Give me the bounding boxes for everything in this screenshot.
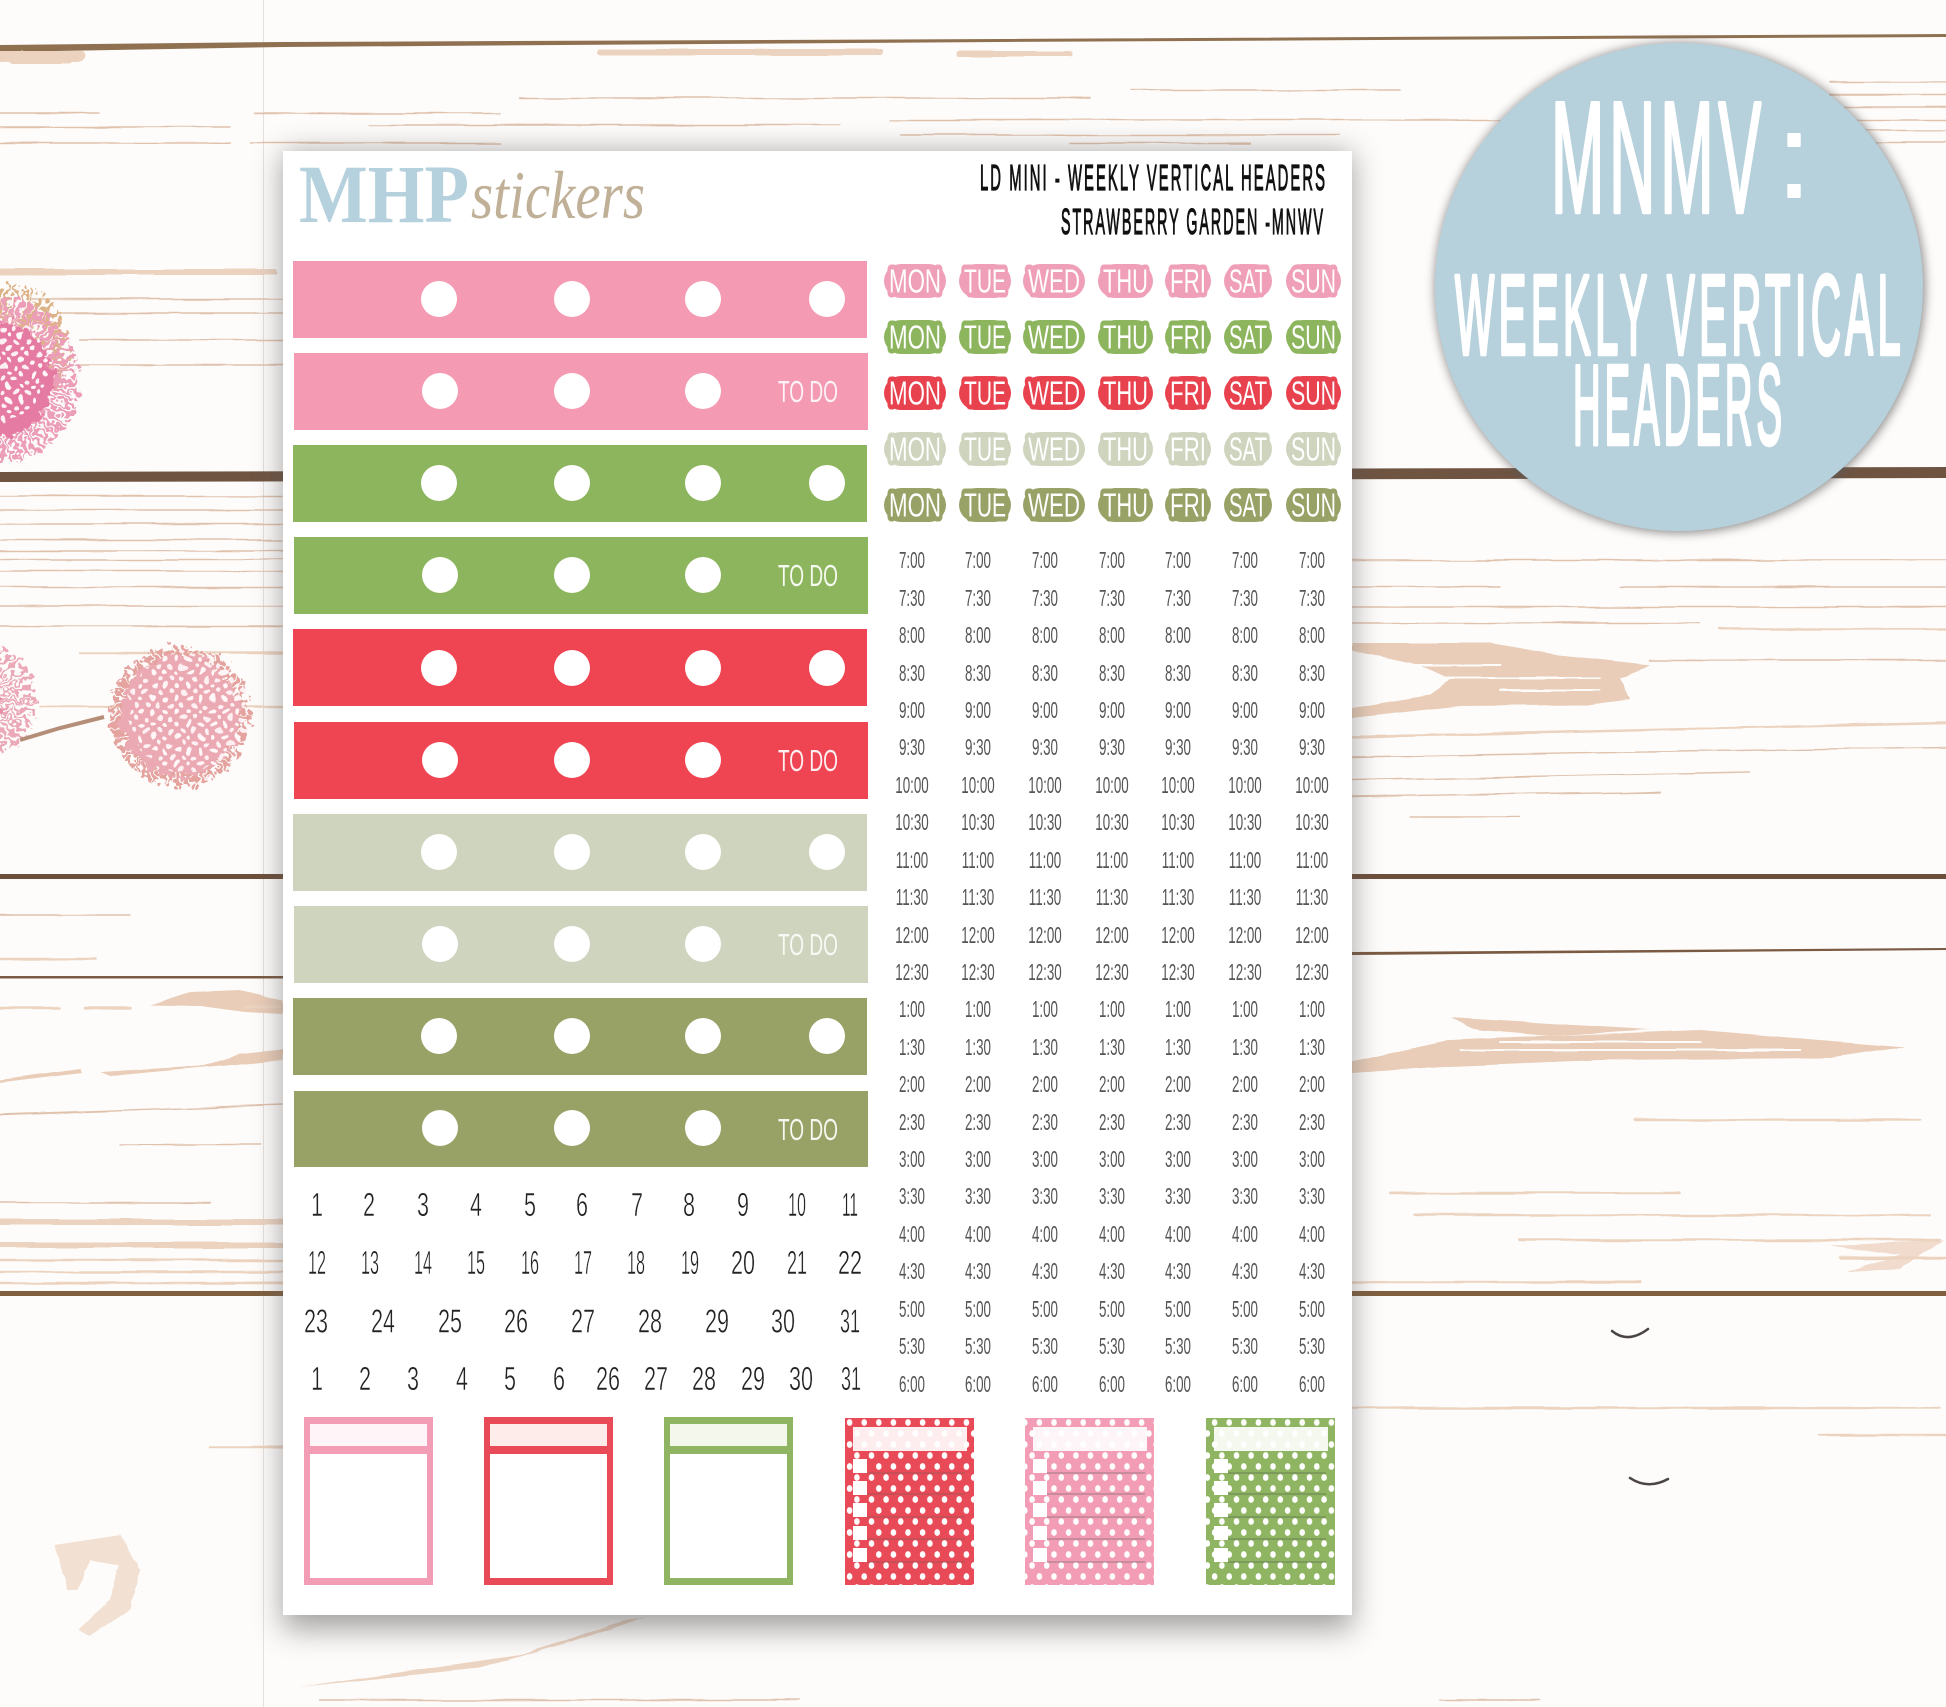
time column: Tuesday: 12:00 xyxy=(961,922,995,948)
time column: Tuesday: 10:00 xyxy=(961,772,995,798)
time column: Friday: 8:30 xyxy=(1165,660,1191,686)
green weekday row xyxy=(889,318,1336,356)
time column: Thursday: 5:00 xyxy=(1099,1296,1125,1322)
time column: Monday: 3:30 xyxy=(899,1183,925,1209)
time column: Friday: 1:30 xyxy=(1165,1034,1191,1060)
time column: Monday: 1:00 xyxy=(899,996,925,1022)
pink weekday row: WED xyxy=(1028,262,1080,300)
time column: Sunday: 7:00 xyxy=(1299,547,1325,573)
time column: Tuesday: 8:00 xyxy=(965,622,991,648)
time column: Thursday: 1:30 xyxy=(1099,1034,1125,1060)
green weekday row: SUN xyxy=(1291,318,1336,356)
time column: Monday: 7:30 xyxy=(899,585,925,611)
time column: Tuesday: 7:00 xyxy=(965,547,991,573)
time column: Thursday: 10:30 xyxy=(1095,809,1129,835)
time column: Friday: 3:30 xyxy=(1165,1183,1191,1209)
time column: Friday: 8:00 xyxy=(1165,622,1191,648)
dates 12 to 22 xyxy=(308,1244,862,1281)
time column: Wednesday: 4:00 xyxy=(1032,1221,1058,1247)
overflow dates row: 5 xyxy=(504,1360,516,1397)
time column: Tuesday: 5:30 xyxy=(965,1333,991,1359)
dates 1 to 11 xyxy=(311,1186,858,1223)
time column: Friday: 10:30 xyxy=(1161,809,1195,835)
overflow dates row: 6 xyxy=(553,1360,565,1397)
olive weekday row: MON xyxy=(889,486,941,524)
green weekday row: FRI xyxy=(1170,318,1206,356)
time column: Friday: 4:30 xyxy=(1165,1258,1191,1284)
dates 12 to 22: 12 xyxy=(308,1244,326,1281)
pink weekday row: FRI xyxy=(1170,262,1206,300)
overflow dates row: 29 xyxy=(741,1360,765,1397)
time column: Sunday: 7:30 xyxy=(1299,585,1325,611)
plank gaps xyxy=(0,34,1946,1296)
date numbers xyxy=(304,1186,862,1397)
overflow dates row: 30 xyxy=(789,1360,813,1397)
dates 23 to 31: 23 xyxy=(304,1302,328,1340)
time column: Saturday: 12:00 xyxy=(1228,922,1262,948)
time column: Tuesday: 4:30 xyxy=(965,1258,991,1284)
time column: Monday: 8:30 xyxy=(899,660,925,686)
pink polka dot list xyxy=(1025,1418,1154,1585)
dates 1 to 11: 8 xyxy=(683,1186,695,1223)
time column: Thursday: 5:30 xyxy=(1099,1333,1125,1359)
red to-do bar: TO DO xyxy=(778,743,838,778)
dates 23 to 31: 28 xyxy=(638,1302,662,1340)
to-do frame stickers xyxy=(304,1417,1335,1585)
time column: Monday: 11:00 xyxy=(896,847,928,873)
dates 1 to 11: 1 xyxy=(311,1186,323,1223)
green weekday row: TUE xyxy=(964,318,1006,356)
time column: Tuesday xyxy=(961,547,995,1397)
time column: Sunday: 6:00 xyxy=(1299,1371,1325,1397)
time column: Thursday: 7:00 xyxy=(1099,547,1125,573)
time column: Sunday: 3:30 xyxy=(1299,1183,1325,1209)
time column: Monday xyxy=(895,547,929,1397)
dates 23 to 31: 30 xyxy=(771,1302,795,1340)
pink to-do bar: TO DO xyxy=(778,374,838,409)
flower: top left xyxy=(0,316,53,438)
time column: Saturday: 11:00 xyxy=(1229,847,1261,873)
dates 12 to 22: 13 xyxy=(361,1244,379,1281)
red weekday row: SAT xyxy=(1229,374,1267,412)
time column: Wednesday: 3:00 xyxy=(1032,1146,1058,1172)
time column: Thursday: 2:00 xyxy=(1099,1071,1125,1097)
sage bar xyxy=(293,814,867,891)
time column: Sunday: 10:30 xyxy=(1295,809,1329,835)
sage weekday row: TUE xyxy=(964,430,1006,468)
green weekday row: WED xyxy=(1028,318,1080,356)
time column: Wednesday: 1:30 xyxy=(1032,1034,1058,1060)
time column: Friday: 10:00 xyxy=(1161,772,1195,798)
time column: Friday: 11:00 xyxy=(1162,847,1194,873)
time column: Sunday: 12:30 xyxy=(1295,959,1329,985)
time column: Monday: 10:30 xyxy=(895,809,929,835)
logo: stickers xyxy=(471,157,645,233)
time column: Friday: 3:00 xyxy=(1165,1146,1191,1172)
green to-do bar xyxy=(294,537,868,614)
pink weekday row: THU xyxy=(1103,262,1148,300)
dates 1 to 11: 9 xyxy=(737,1186,749,1223)
time column: Tuesday: 3:00 xyxy=(965,1146,991,1172)
time column: Thursday: 10:00 xyxy=(1095,772,1129,798)
overflow dates row: 27 xyxy=(644,1360,668,1397)
time column: Sunday: 5:00 xyxy=(1299,1296,1325,1322)
time column: Saturday: 3:30 xyxy=(1232,1183,1258,1209)
olive to-do bar: TO DO xyxy=(778,1112,838,1147)
red frame xyxy=(484,1417,613,1585)
weekday labels xyxy=(889,262,1336,524)
red bar xyxy=(293,629,867,706)
pink weekday row xyxy=(889,262,1336,300)
dates 23 to 31: 24 xyxy=(371,1302,395,1340)
time column: Tuesday: 3:30 xyxy=(965,1183,991,1209)
time column: Wednesday: 1:00 xyxy=(1032,996,1058,1022)
time column: Monday: 8:00 xyxy=(899,622,925,648)
dates 23 to 31: 29 xyxy=(705,1302,729,1340)
overflow dates row: 4 xyxy=(456,1360,468,1397)
dates 1 to 11: 5 xyxy=(524,1186,536,1223)
pink frame xyxy=(304,1417,433,1585)
sheet shadow xyxy=(283,153,1352,1629)
overflow dates row: 2 xyxy=(359,1360,371,1397)
time column: Monday: 5:00 xyxy=(899,1296,925,1322)
time column: Sunday: 4:00 xyxy=(1299,1221,1325,1247)
dates 1 to 11: 7 xyxy=(631,1186,643,1223)
time column: Wednesday: 7:30 xyxy=(1032,585,1058,611)
time column: Tuesday: 10:30 xyxy=(961,809,995,835)
time column: Saturday: 8:30 xyxy=(1232,660,1258,686)
time column: Saturday: 12:30 xyxy=(1228,959,1262,985)
time column: Thursday xyxy=(1095,547,1129,1397)
sheet title xyxy=(980,157,1327,242)
time column: Wednesday: 10:00 xyxy=(1028,772,1062,798)
time column: Tuesday: 2:30 xyxy=(965,1109,991,1135)
time column: Wednesday: 9:00 xyxy=(1032,697,1058,723)
dates 12 to 22: 17 xyxy=(574,1244,592,1281)
olive weekday row: SAT xyxy=(1229,486,1267,524)
pink weekday row: MON xyxy=(889,262,941,300)
dates 12 to 22: 22 xyxy=(838,1244,862,1281)
time column: Wednesday: 11:00 xyxy=(1029,847,1061,873)
olive to-do bar xyxy=(294,1091,868,1167)
dates 12 to 22: 19 xyxy=(681,1244,699,1281)
time column: Friday: 12:30 xyxy=(1161,959,1195,985)
red weekday row: THU xyxy=(1103,374,1148,412)
overflow dates row: 28 xyxy=(692,1360,716,1397)
pink weekday row: SUN xyxy=(1291,262,1336,300)
green weekday row: SAT xyxy=(1229,318,1267,356)
time column: Thursday: 4:00 xyxy=(1099,1221,1125,1247)
time column: Sunday: 1:00 xyxy=(1299,996,1325,1022)
olive weekday row: SUN xyxy=(1291,486,1336,524)
time column: Sunday: 8:00 xyxy=(1299,622,1325,648)
sage to-do bar xyxy=(294,906,868,983)
time column: Thursday: 7:30 xyxy=(1099,585,1125,611)
time column: Wednesday: 4:30 xyxy=(1032,1258,1058,1284)
time column: Tuesday: 11:30 xyxy=(962,884,994,910)
text: STRAWBERRY GARDEN -MNWV xyxy=(1061,201,1325,242)
pink bar xyxy=(293,261,867,338)
dates 23 to 31: 25 xyxy=(438,1302,462,1340)
overflow dates row: 31 xyxy=(841,1360,861,1397)
time column: Monday: 12:00 xyxy=(895,922,929,948)
sage weekday row xyxy=(889,430,1336,468)
time column: Thursday: 11:00 xyxy=(1096,847,1128,873)
dates 12 to 22: 20 xyxy=(731,1244,755,1281)
badge text xyxy=(1455,70,1905,468)
time column: Monday: 11:30 xyxy=(896,884,928,910)
overflow dates row xyxy=(311,1360,861,1397)
time column: Sunday: 4:30 xyxy=(1299,1258,1325,1284)
time column: Wednesday: 12:30 xyxy=(1028,959,1062,985)
time column: Tuesday: 9:00 xyxy=(965,697,991,723)
green polka dot list xyxy=(1206,1418,1335,1585)
time column: Tuesday: 12:30 xyxy=(961,959,995,985)
olive weekday row: THU xyxy=(1103,486,1148,524)
time column: Thursday: 8:00 xyxy=(1099,622,1125,648)
logo: MHP xyxy=(299,148,469,240)
time column: Sunday: 3:00 xyxy=(1299,1146,1325,1172)
time column: Monday: 5:30 xyxy=(899,1333,925,1359)
time column: Saturday: 6:00 xyxy=(1232,1371,1258,1397)
time column: Sunday xyxy=(1295,547,1329,1397)
header bars xyxy=(293,261,868,1167)
red weekday row: MON xyxy=(889,374,941,412)
time column: Thursday: 11:30 xyxy=(1096,884,1128,910)
time column: Sunday: 12:00 xyxy=(1295,922,1329,948)
time column: Monday: 2:00 xyxy=(899,1071,925,1097)
dates 23 to 31 xyxy=(304,1302,860,1340)
time column: Saturday: 1:30 xyxy=(1232,1034,1258,1060)
time column: Sunday: 10:00 xyxy=(1295,772,1329,798)
time column: Sunday: 5:30 xyxy=(1299,1333,1325,1359)
dates 23 to 31: 31 xyxy=(840,1302,860,1340)
time column: Friday: 7:30 xyxy=(1165,585,1191,611)
time column: Friday: 6:00 xyxy=(1165,1371,1191,1397)
circle badge shadow xyxy=(1435,43,1925,533)
pink weekday row: SAT xyxy=(1229,262,1267,300)
time column: Sunday: 2:30 xyxy=(1299,1109,1325,1135)
time column: Thursday: 12:30 xyxy=(1095,959,1129,985)
date numbers: 11 xyxy=(842,1186,858,1223)
time column: Saturday: 5:30 xyxy=(1232,1333,1258,1359)
time column: Friday: 7:00 xyxy=(1165,547,1191,573)
time column: Wednesday xyxy=(1028,547,1062,1397)
time column: Sunday: 8:30 xyxy=(1299,660,1325,686)
time column: Wednesday: 2:00 xyxy=(1032,1071,1058,1097)
time column: Saturday: 1:00 xyxy=(1232,996,1258,1022)
flower: pink bloom xyxy=(120,652,248,776)
time column: Thursday: 3:00 xyxy=(1099,1146,1125,1172)
time column: Thursday: 9:00 xyxy=(1099,697,1125,723)
time column: Saturday: 11:30 xyxy=(1229,884,1261,910)
time column: Wednesday: 5:30 xyxy=(1032,1333,1058,1359)
dates 1 to 11: 6 xyxy=(576,1186,588,1223)
time column: Monday: 10:00 xyxy=(895,772,929,798)
red weekday row: FRI xyxy=(1170,374,1206,412)
green bar xyxy=(293,445,867,522)
time column: Saturday xyxy=(1228,547,1262,1397)
circle badge xyxy=(1435,43,1923,531)
dates 12 to 22: 14 xyxy=(414,1244,432,1281)
dates 12 to 22: 15 xyxy=(467,1244,485,1281)
time column: Thursday: 6:00 xyxy=(1099,1371,1125,1397)
dates 1 to 11: 3 xyxy=(417,1186,429,1223)
time column: Thursday: 1:00 xyxy=(1099,996,1125,1022)
red to-do bar xyxy=(294,722,868,799)
time column: Monday: 12:30 xyxy=(895,959,929,985)
time column: Thursday: 12:00 xyxy=(1095,922,1129,948)
logo xyxy=(299,148,645,240)
time column: Monday: 2:30 xyxy=(899,1109,925,1135)
time column: Tuesday: 6:00 xyxy=(965,1371,991,1397)
overflow dates row: 3 xyxy=(407,1360,419,1397)
dates 12 to 22: 16 xyxy=(521,1244,539,1281)
sage to-do bar: TO DO xyxy=(778,927,838,962)
pink weekday row: TUE xyxy=(964,262,1006,300)
time column: Thursday: 2:30 xyxy=(1099,1109,1125,1135)
sage weekday row: SAT xyxy=(1229,430,1267,468)
time column: Wednesday: 5:00 xyxy=(1032,1296,1058,1322)
time column: Saturday: 2:30 xyxy=(1232,1109,1258,1135)
dates 12 to 22: 18 xyxy=(627,1244,645,1281)
sage weekday row: WED xyxy=(1028,430,1080,468)
red polka dot list xyxy=(845,1418,974,1585)
sage weekday row: MON xyxy=(889,430,941,468)
dates 23 to 31: 27 xyxy=(571,1302,595,1340)
green to-do bar: TO DO xyxy=(778,558,838,593)
text: LD MINI - WEEKLY VERTICAL HEADERS xyxy=(980,157,1327,198)
time column: Friday: 2:30 xyxy=(1165,1109,1191,1135)
time column: Tuesday: 7:30 xyxy=(965,585,991,611)
time column: Wednesday: 2:30 xyxy=(1032,1109,1058,1135)
overflow dates row: 26 xyxy=(596,1360,620,1397)
flower: left edge xyxy=(0,670,5,730)
sage weekday row: THU xyxy=(1103,430,1148,468)
flower: stem xyxy=(20,717,104,740)
dates 1 to 11: 4 xyxy=(470,1186,482,1223)
time column: Saturday: 8:00 xyxy=(1232,622,1258,648)
badge text: : xyxy=(1777,90,1811,223)
time column: Monday: 1:30 xyxy=(899,1034,925,1060)
time column: Saturday: 5:00 xyxy=(1232,1296,1258,1322)
olive weekday row xyxy=(889,486,1336,524)
time column: Monday: 7:00 xyxy=(899,547,925,573)
time column: Monday: 6:00 xyxy=(899,1371,925,1397)
red weekday row xyxy=(889,374,1336,412)
time column: Tuesday: 4:00 xyxy=(965,1221,991,1247)
time column: Friday: 1:00 xyxy=(1165,996,1191,1022)
time column: Sunday: 9:30 xyxy=(1299,734,1325,760)
red weekday row: WED xyxy=(1028,374,1080,412)
time column: Tuesday: 9:30 xyxy=(965,734,991,760)
time column: Tuesday: 1:00 xyxy=(965,996,991,1022)
time column: Tuesday: 8:30 xyxy=(965,660,991,686)
olive weekday row: TUE xyxy=(964,486,1006,524)
time column: Saturday: 9:30 xyxy=(1232,734,1258,760)
dark wood marks xyxy=(1612,1329,1668,1484)
time column: Wednesday: 3:30 xyxy=(1032,1183,1058,1209)
time column: Monday: 3:00 xyxy=(899,1146,925,1172)
time column: Thursday: 3:30 xyxy=(1099,1183,1125,1209)
time column: Saturday: 4:30 xyxy=(1232,1258,1258,1284)
time column: Thursday: 8:30 xyxy=(1099,660,1125,686)
highlights breaking up the worn patches xyxy=(1380,665,1800,1050)
time column: Tuesday: 2:00 xyxy=(965,1071,991,1097)
green weekday row: MON xyxy=(889,318,941,356)
time column: Wednesday: 8:00 xyxy=(1032,622,1058,648)
time column: Friday: 4:00 xyxy=(1165,1221,1191,1247)
time column: Saturday: 7:00 xyxy=(1232,547,1258,573)
time column: Wednesday: 9:30 xyxy=(1032,734,1058,760)
time column: Wednesday: 7:00 xyxy=(1032,547,1058,573)
time column: Friday: 5:00 xyxy=(1165,1296,1191,1322)
time column: Friday: 9:00 xyxy=(1165,697,1191,723)
time column: Saturday: 10:30 xyxy=(1228,809,1262,835)
time column: Saturday: 3:00 xyxy=(1232,1146,1258,1172)
red weekday row: SUN xyxy=(1291,374,1336,412)
green frame xyxy=(664,1417,793,1585)
time column: Sunday: 1:30 xyxy=(1299,1034,1325,1060)
time column: Wednesday: 11:30 xyxy=(1029,884,1061,910)
dates 23 to 31: 26 xyxy=(504,1302,528,1340)
time column: Saturday: 4:00 xyxy=(1232,1221,1258,1247)
time column: Friday xyxy=(1161,547,1195,1397)
time column: Monday: 9:30 xyxy=(899,734,925,760)
time column: Wednesday: 10:30 xyxy=(1028,809,1062,835)
time column: Friday: 9:30 xyxy=(1165,734,1191,760)
time column: Saturday: 7:30 xyxy=(1232,585,1258,611)
time column: Tuesday: 5:00 xyxy=(965,1296,991,1322)
time column: Wednesday: 6:00 xyxy=(1032,1371,1058,1397)
time column: Saturday: 10:00 xyxy=(1228,772,1262,798)
olive weekday row: WED xyxy=(1028,486,1080,524)
time column: Sunday: 11:00 xyxy=(1296,847,1328,873)
time column: Tuesday: 11:00 xyxy=(962,847,994,873)
time column: Monday: 4:00 xyxy=(899,1221,925,1247)
red weekday row: TUE xyxy=(964,374,1006,412)
time column: Sunday: 2:00 xyxy=(1299,1071,1325,1097)
dates 1 to 11: 10 xyxy=(788,1186,806,1223)
time column: Friday: 11:30 xyxy=(1162,884,1194,910)
olive weekday row: FRI xyxy=(1170,486,1206,524)
time column: Friday: 12:00 xyxy=(1161,922,1195,948)
time column: Wednesday: 8:30 xyxy=(1032,660,1058,686)
time column: Friday: 2:00 xyxy=(1165,1071,1191,1097)
olive bar xyxy=(293,998,867,1075)
sage weekday row: SUN xyxy=(1291,430,1336,468)
pink to-do bar xyxy=(294,353,868,430)
time column: Thursday: 4:30 xyxy=(1099,1258,1125,1284)
sage weekday row: FRI xyxy=(1170,430,1206,468)
time column: Tuesday: 1:30 xyxy=(965,1034,991,1060)
time column: Monday: 9:00 xyxy=(899,697,925,723)
time column: Monday: 4:30 xyxy=(899,1258,925,1284)
time column: Thursday: 9:30 xyxy=(1099,734,1125,760)
dates 1 to 11: 2 xyxy=(363,1186,375,1223)
time column: Friday: 5:30 xyxy=(1165,1333,1191,1359)
overflow dates row: 1 xyxy=(311,1360,323,1397)
dates 12 to 22: 21 xyxy=(787,1244,807,1281)
sticker sheet xyxy=(283,148,1352,1615)
time column: Saturday: 2:00 xyxy=(1232,1071,1258,1097)
time column: Saturday: 9:00 xyxy=(1232,697,1258,723)
green weekday row: THU xyxy=(1103,318,1148,356)
time column: Wednesday: 12:00 xyxy=(1028,922,1062,948)
time column: Sunday: 9:00 xyxy=(1299,697,1325,723)
time column: Sunday: 11:30 xyxy=(1296,884,1328,910)
